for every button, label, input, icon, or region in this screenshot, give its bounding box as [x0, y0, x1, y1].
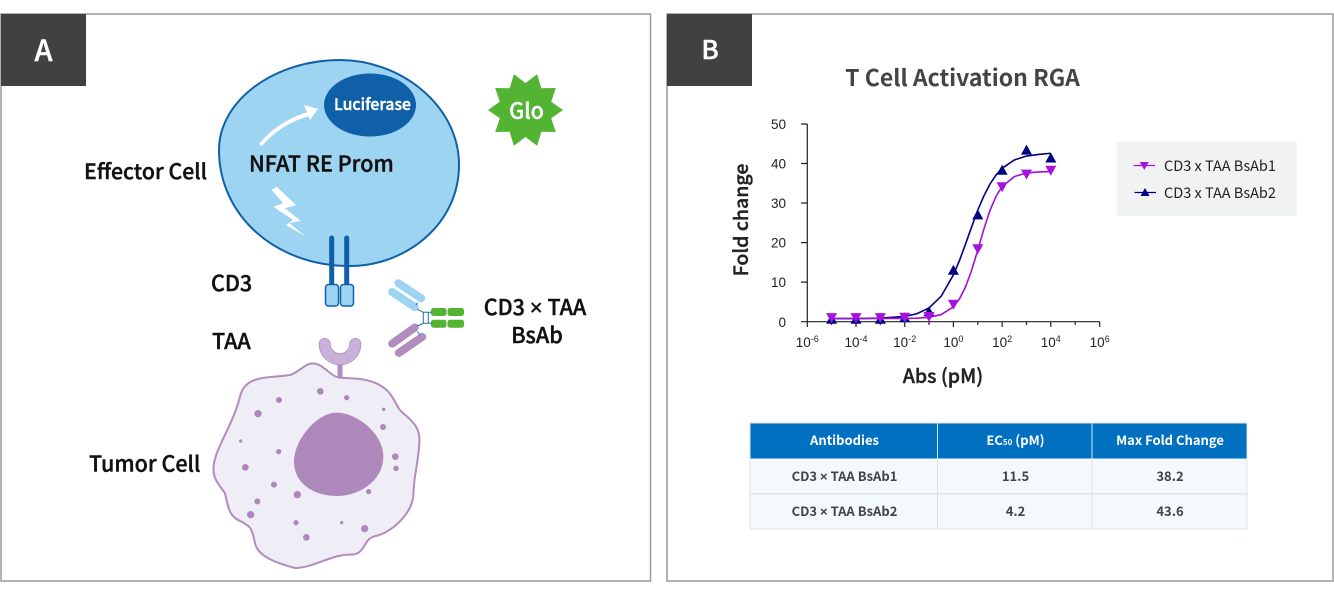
tumor nucleus: [294, 413, 383, 496]
x axis tick labels: [796, 334, 1110, 350]
axes: [801, 124, 1100, 327]
panel A tab: A: [34, 28, 53, 70]
NFAT RE Prom label: NFAT RE Prom: [249, 148, 394, 178]
CD3 x TAA BsAb label: CD3 × TAA: [484, 291, 587, 322]
x axis tick labels: 10: [844, 335, 860, 350]
panel A tab: [1, 14, 86, 86]
y axis tick labels: 40: [771, 156, 786, 172]
table row BsAb1: [792, 466, 1184, 485]
y axis title: Fold change: [725, 164, 754, 276]
x axis tick labels: -2: [908, 334, 916, 344]
table row BsAb2: CD3 × TAA BsAb2: [792, 501, 897, 520]
series BsAb2: [826, 145, 1056, 324]
effector cell body: [219, 60, 459, 266]
table header: Antibodies: [809, 430, 879, 449]
bispecific antibody: [392, 283, 464, 353]
table row BsAb2: [792, 501, 1184, 520]
arrow: promoter to luciferase: [259, 105, 318, 146]
x axis tick labels: 2: [1007, 334, 1012, 344]
y axis tick labels: 20: [771, 236, 786, 250]
table header: EC50 (pM): [986, 430, 1045, 449]
x axis tick labels: -6: [811, 334, 819, 344]
x axis tick labels: 10: [1041, 335, 1056, 350]
y axis tick labels: 10: [771, 275, 786, 290]
CD3 label: CD3: [211, 267, 252, 298]
series BsAb1: [826, 166, 1056, 323]
luciferase ellipse: Luciferase: [334, 92, 411, 115]
TAA receptor: [325, 344, 355, 378]
Tumor Cell label: Tumor Cell: [89, 448, 200, 478]
x axis tick labels: 0: [958, 334, 963, 344]
CD3 receptor: [326, 238, 354, 306]
panel A: effector and tumor cell assay: [1, 14, 650, 581]
legend entry BsAb2: CD3 x TAA BsAb2: [1164, 182, 1276, 203]
chart title: T Cell Activation RGA: [845, 59, 1080, 93]
panel B: T cell activation results: [667, 14, 1333, 581]
TAA label: TAA: [212, 325, 251, 356]
CD3 x TAA BsAb label: [484, 291, 587, 350]
icon: lightning signal: [272, 187, 306, 237]
x axis tick labels: -4: [860, 334, 868, 344]
y axis tick labels: 30: [771, 196, 786, 211]
dose response chart: [725, 117, 1110, 389]
tumor cell: [213, 363, 419, 568]
results table: [750, 423, 1247, 529]
tumor granules: [239, 388, 399, 541]
y axis tick labels: 0: [778, 315, 786, 330]
x axis tick labels: 4: [1056, 334, 1061, 344]
panel B tab: B: [701, 30, 719, 67]
panel B tab: [667, 14, 752, 86]
x axis tick labels: 10: [796, 335, 811, 350]
x axis title: Abs (pM): [903, 360, 983, 389]
y axis tick labels: 50: [771, 117, 786, 132]
table row BsAb1: 38.2: [1156, 466, 1184, 485]
chart legend: [1117, 142, 1297, 216]
x axis tick labels: 6: [1105, 334, 1110, 344]
legend entry BsAb1: CD3 x TAA BsAb1: [1164, 155, 1276, 176]
x axis tick labels: 10: [992, 335, 1007, 350]
Effector Cell label: Effector Cell: [84, 155, 207, 186]
table header: [809, 430, 1224, 449]
table row BsAb2: 4.2: [1006, 501, 1025, 520]
table header: Max Fold Change: [1116, 430, 1224, 449]
table row BsAb1: CD3 × TAA BsAb1: [792, 466, 897, 485]
x axis tick labels: 10: [893, 335, 908, 350]
CD3 x TAA BsAb label: BsAb: [511, 319, 563, 350]
x axis tick labels: 10: [1090, 335, 1105, 350]
icon: Glo starburst: Glo: [509, 94, 544, 126]
x axis tick labels: 10: [943, 335, 958, 350]
icon: Glo starburst: [488, 74, 563, 146]
table row BsAb1: 11.5: [1002, 466, 1029, 485]
luciferase ellipse: [324, 74, 416, 136]
table row BsAb2: 43.6: [1156, 501, 1184, 520]
y axis tick labels: [771, 117, 786, 330]
